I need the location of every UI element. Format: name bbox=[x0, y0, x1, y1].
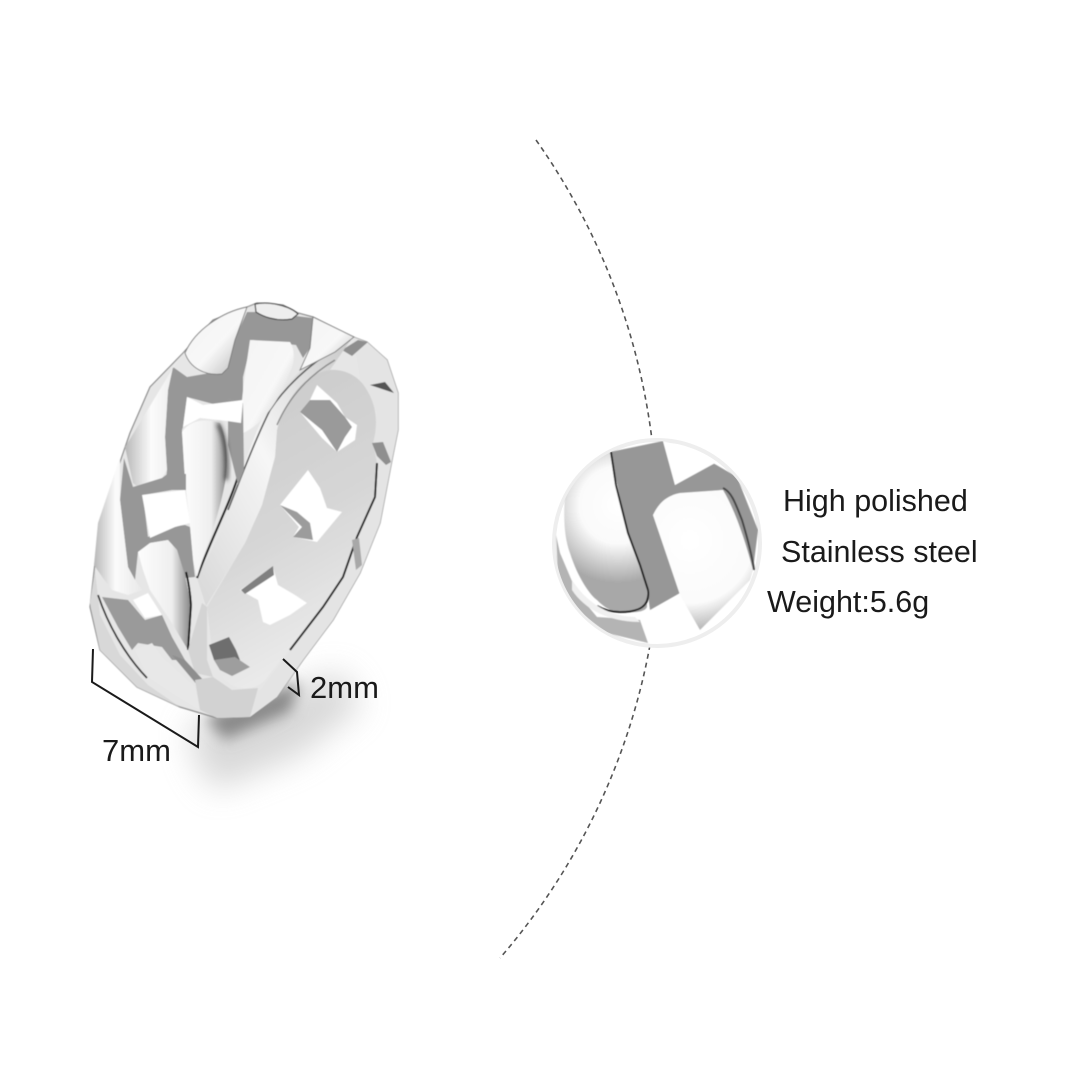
rim lower chunk bbox=[352, 538, 362, 570]
right polished lobe bbox=[653, 490, 753, 630]
bottom link bbox=[135, 643, 200, 710]
left lobe dark outline bbox=[597, 452, 648, 612]
dashed arc upper bbox=[536, 140, 652, 440]
infographic canvas bbox=[88, 140, 976, 958]
upper left link bbox=[125, 353, 183, 487]
central spine bbox=[188, 603, 213, 677]
7mm dimension bracket bbox=[92, 649, 199, 747]
white opening middle bbox=[142, 490, 190, 538]
ring cast shadow bbox=[190, 672, 362, 790]
band second groove bbox=[277, 360, 335, 425]
rim bottom-left bbox=[90, 570, 180, 707]
rim grey chunk bbox=[372, 442, 391, 465]
left polished lobe bbox=[564, 452, 647, 612]
detail magnifier circle bbox=[554, 440, 760, 646]
rim dark seam bbox=[290, 463, 377, 650]
lower left link bbox=[94, 457, 142, 595]
top textured band bbox=[165, 312, 313, 490]
grey sliver bbox=[172, 655, 205, 686]
dashed arc lower bbox=[500, 645, 650, 958]
7mm label: 7mm bbox=[102, 733, 171, 768]
bottom band bbox=[195, 677, 258, 718]
bottom rim highlight bbox=[572, 580, 640, 622]
window hole 1 bbox=[300, 385, 357, 452]
top right white bbox=[663, 441, 717, 485]
window hole 2 bbox=[280, 470, 342, 542]
spec text: weight: Weight:5.6g bbox=[767, 585, 929, 619]
left bottom groove bbox=[98, 595, 147, 678]
upper centre teardrop bbox=[241, 340, 294, 433]
second textured gap bbox=[120, 458, 195, 580]
lower textured blob bbox=[102, 597, 185, 660]
top left link bbox=[185, 307, 247, 374]
bottom white opening bbox=[640, 597, 697, 643]
bottom left rim bbox=[556, 535, 648, 643]
textured band bbox=[610, 441, 758, 610]
2mm label: 2mm bbox=[310, 670, 379, 705]
rim dark mark top bbox=[370, 382, 394, 393]
centre link bbox=[182, 420, 227, 577]
grey beside upper teardrop bbox=[228, 398, 244, 485]
white opening lower bbox=[133, 593, 162, 618]
spec text: finish: High polished bbox=[783, 484, 968, 518]
window hole 4 bbox=[209, 637, 240, 660]
window hole 3 bbox=[240, 567, 307, 625]
inner wall of ring bbox=[207, 370, 377, 688]
top right link bbox=[300, 317, 354, 370]
ring product image bbox=[90, 303, 398, 718]
groove beside lower link bbox=[186, 572, 191, 650]
ring silhouette bbox=[90, 303, 398, 718]
2mm dimension bracket bbox=[283, 659, 299, 695]
band dark groove upper bbox=[228, 340, 350, 510]
right lobe outline bbox=[723, 488, 754, 570]
band dark groove lower bbox=[197, 470, 240, 578]
top right grey lip bbox=[342, 340, 368, 356]
white opening upper bbox=[183, 397, 243, 427]
small top facet bbox=[255, 303, 298, 320]
lower centre link bbox=[138, 540, 190, 650]
diagonal band beside inner wall bbox=[197, 338, 352, 606]
centre link dark edge bbox=[218, 424, 227, 480]
right outer rim bbox=[213, 337, 398, 718]
spec text: material: Stainless steel bbox=[781, 535, 978, 569]
